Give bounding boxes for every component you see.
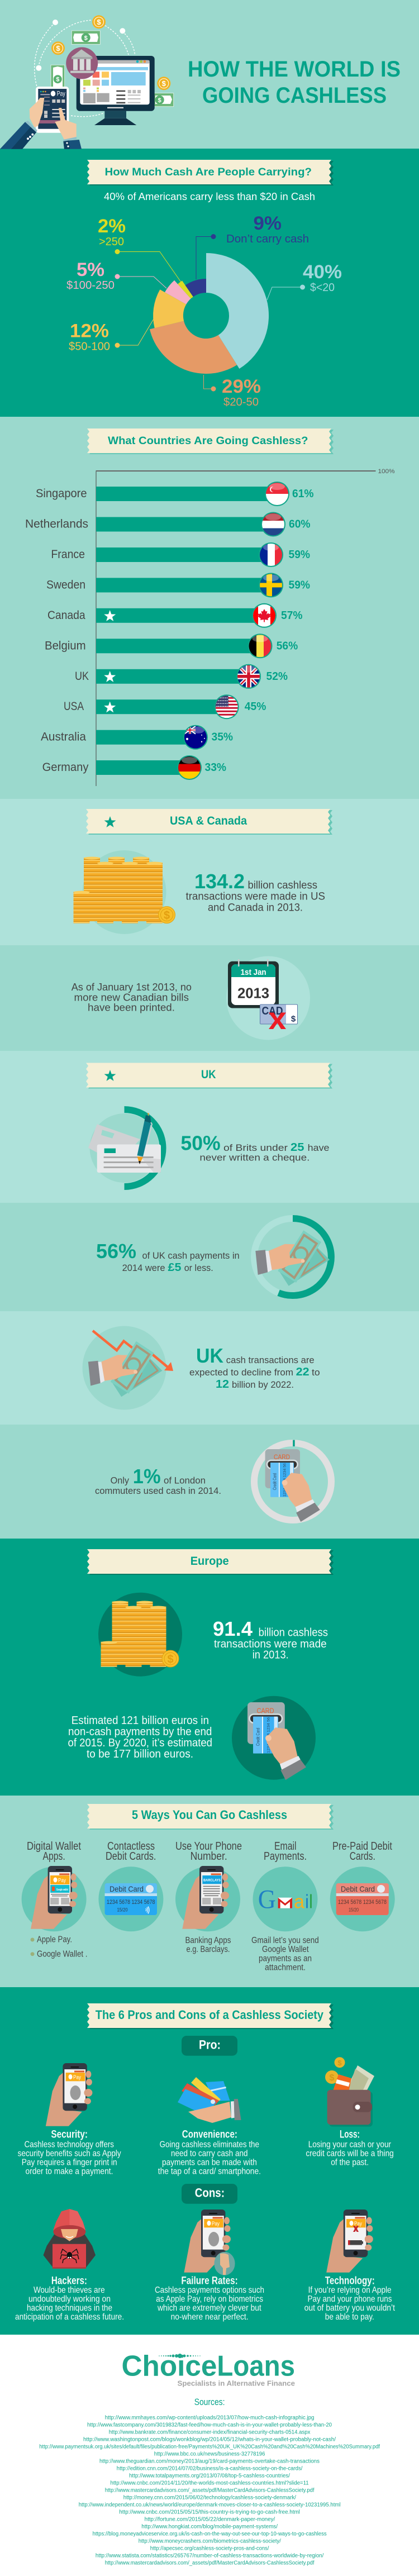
- way: email payments: payments as an: [259, 1954, 312, 1964]
- label: 40%: [267, 261, 342, 300]
- icon: calendar and banknote: 2013: [237, 984, 269, 1001]
- text: source list: http://edition.cnn.com/2014/07/02/business/is-a-cashless-society-on-the-cards/: [117, 2465, 303, 2472]
- con: failure rates: Failure Rates:: [181, 2275, 238, 2287]
- panel: footer: [39, 2350, 380, 2566]
- con: technology: If you’re relying on Apple: [308, 2285, 392, 2295]
- way: use your phone number: Banking Apps: [185, 1936, 231, 1945]
- panel: how much cash: [66, 160, 342, 408]
- icon: calendar and banknote: CAD: [261, 1005, 283, 1017]
- icon: coin stacks: $: [164, 910, 170, 922]
- bar: Sweden: [46, 573, 310, 597]
- bar: Belgium: [45, 634, 298, 658]
- panel: hero: [0, 15, 401, 149]
- heading: UK: [86, 1063, 332, 1088]
- logo: Choice Loans: [122, 2350, 295, 2388]
- pro: loss: [306, 2057, 394, 2167]
- logo: Choice Loans: Loans: [217, 2350, 295, 2382]
- label: 29%: 29%: [222, 376, 261, 397]
- bar: Belgium: Belgium: [45, 639, 86, 652]
- stat: 1% of commuters: [95, 1465, 221, 1496]
- text: source list: http://www.bankrate.com/finance/consumer-index/financial-security-charts-0514.aspx: [109, 2429, 310, 2435]
- icon: payments illustration: $: [56, 77, 59, 83]
- icon: coin stacks: [98, 1593, 182, 1677]
- text: source list: http://www.mastercardadvisors.com/_assets/pdf/MasterCardAdvisors-CashlessSociety.pdf: [105, 2560, 315, 2566]
- donut chart: [150, 253, 269, 374]
- stat: UK cash decline: cash transactions are: [226, 1355, 315, 1365]
- bar: UK: 52%: [266, 670, 288, 683]
- text: estimated euros: to be 177 billion euros.: [87, 1748, 193, 1760]
- icon: cheque and pen: [88, 1110, 163, 1187]
- label: 5%: [66, 259, 166, 292]
- pro: security: [18, 2063, 121, 2176]
- way: pre-paid debit cards: Debit Card: [341, 1884, 375, 1893]
- panel: pros and cons: [15, 2003, 395, 2322]
- way: digital wallet apps: Google wallet: [56, 1888, 68, 1892]
- con: technology: out of battery you wouldn’t: [304, 2303, 395, 2313]
- badge: cons: Cons:: [195, 2186, 225, 2200]
- stat: 1% of commuters: commuters used cash in 2014.: [95, 1485, 221, 1496]
- way: contactless debit cards: [98, 1840, 163, 1931]
- text: source list: http://www.hongkiat.com/blog/mobile-payment-systems/: [141, 2523, 278, 2530]
- way: contactless debit cards: Contactless: [107, 1840, 155, 1853]
- pro: security: Security:: [51, 2129, 88, 2141]
- icon: payments illustration: $: [158, 97, 161, 104]
- panel: Europe: [68, 1549, 334, 1780]
- heading: countries: [87, 428, 334, 454]
- con: failure rates: Pay: [212, 2221, 220, 2227]
- bar: Canada: [47, 603, 303, 628]
- bar: USA: [64, 694, 266, 719]
- bar: Netherlands: 60%: [289, 518, 311, 531]
- text: source list: http://money.cnn.com/2015/06/02/technology/cashless-society-denmark/: [123, 2494, 296, 2501]
- label: 2%: >250: [99, 236, 124, 248]
- stat: 50% of Brits: of Brits under: [223, 1142, 288, 1153]
- way: email payments: Email: [274, 1840, 296, 1853]
- bar: Germany: Germany: [42, 761, 89, 774]
- way: email payments: attachment.: [265, 1963, 306, 1973]
- way: use your phone number: BARCLAYS: [203, 1879, 221, 1883]
- pro: convenience: the tap of a card/ smartphone.: [158, 2166, 261, 2176]
- title: GOING CASHLESS: [202, 83, 387, 108]
- heading: USA and Canada: [86, 809, 332, 835]
- icon: coin stacks: [74, 850, 175, 934]
- way: use your phone number: e.g. Barclays.: [187, 1945, 230, 1954]
- stat: 56% of payments: 56%: [96, 1240, 136, 1263]
- stat: 56% of payments: or less.: [184, 1263, 213, 1273]
- text: estimated euros: non-cash payments by the end: [68, 1726, 212, 1738]
- text: source list: http://www.totalpayments.org/2013/07/08/top-5-cashless-countries/: [129, 2473, 290, 2479]
- label: 9%: [196, 213, 309, 279]
- stat: 134.2 billion: transactions were made in US: [185, 891, 325, 903]
- label: 12%: [69, 319, 154, 353]
- label: 2%: 2%: [98, 216, 126, 237]
- heading: pros and cons: The 6 Pros and Cons of a Cashless Society: [96, 2008, 324, 2022]
- stat: UK cash decline: to: [312, 1367, 320, 1378]
- pro: security: order to make a payment.: [26, 2166, 113, 2176]
- con: hackers: [15, 2209, 124, 2322]
- text: estimated euros: of 2015. By 2020, it’s estimated: [68, 1737, 212, 1749]
- con: hackers: Hackers:: [51, 2275, 87, 2287]
- way: email payments: a: [294, 1892, 304, 1913]
- bar: Sweden: Sweden: [46, 578, 85, 591]
- label: 12%: 12%: [70, 321, 109, 342]
- stat: 56% of payments: [96, 1240, 240, 1274]
- pro: convenience: Convenience:: [182, 2129, 237, 2141]
- text: source list: http://www.fastcompany.com/3019832/fast-feed/how-much-cash-is-in-your-wallet-probably-less-than-20: [87, 2422, 332, 2428]
- text: Canadian bills: have been printed.: [88, 1001, 175, 1013]
- bar chart: 100%: [378, 468, 395, 475]
- text: source list: http://www.bbc.co.uk/news/business-32778196: [154, 2451, 265, 2457]
- text: source list: http://www.theguardian.com/money/2013/aug/19/card-payments-overtake-cash-transactions: [99, 2458, 320, 2464]
- icon: card machine, 1% ring: Credit Card: [273, 1473, 278, 1490]
- label: 5%: $100-250: [66, 279, 115, 292]
- icon: hand with cash and falling arrow: [83, 1326, 173, 1410]
- badge: cons: [182, 2184, 237, 2204]
- way: contactless debit cards: 15/20: [117, 1907, 128, 1913]
- stat: 91.4 billion: 91.4: [213, 1617, 253, 1640]
- label: 29%: $20-50: [223, 396, 259, 408]
- pro: security: Cashless technology offers: [25, 2140, 114, 2149]
- bar: Canada: 57%: [281, 610, 303, 622]
- label: 2%: [98, 216, 181, 282]
- pro: loss: $: [330, 2073, 335, 2083]
- bar: Sweden: 59%: [288, 579, 310, 591]
- way: use your phone number: Number.: [191, 1850, 227, 1863]
- stat: 1% of commuters: 1%: [133, 1465, 161, 1488]
- text: source list: http://www.paymentsuk.org.uk/sites/default/files/publication-free/Payments%20UK_UK%20Cash%20and%20Cash%20Machines%20Summary.pdf: [39, 2444, 380, 2450]
- way: email payments: Gmail let’s you send: [251, 1936, 319, 1945]
- pro: convenience: [158, 2077, 261, 2176]
- con: failure rates: Cashless payments options such: [155, 2285, 264, 2295]
- stat: 56% of payments: 2014 were: [122, 1263, 165, 1273]
- icon: payments illustration: [0, 15, 174, 149]
- heading: pros and cons: [87, 2003, 334, 2029]
- stat: 134.2 billion: and Canada in 2013.: [208, 902, 303, 913]
- con: technology: [304, 2210, 395, 2322]
- text: Canadian bills: As of January 1st 2013, no: [72, 981, 192, 993]
- way: pre-paid debit cards: Cards.: [350, 1850, 375, 1863]
- con: hackers: anticipation of a cashless future.: [15, 2312, 124, 2322]
- icon: coin stacks: $: [167, 1654, 174, 1666]
- bar: Netherlands: [25, 512, 311, 536]
- label: 9%: Don’t carry cash: [226, 233, 309, 245]
- way: pre-paid debit cards: 1234 5678 1234 5678: [338, 1899, 387, 1906]
- stat: 50% of Brits: never written a cheque.: [199, 1152, 310, 1163]
- pro: loss: Loss:: [340, 2129, 360, 2141]
- label: 12%: $50-100: [69, 341, 110, 353]
- pro: loss: Losing your cash or your: [308, 2140, 392, 2149]
- con: failure rates: [155, 2210, 264, 2322]
- con: failure rates: which are extremely clever but: [157, 2303, 261, 2313]
- panel: countries: [25, 428, 395, 786]
- pro: loss: of the past.: [331, 2158, 369, 2167]
- con: technology: Technology:: [325, 2275, 375, 2287]
- way: pre-paid debit cards: [330, 1840, 395, 1931]
- pro: loss: $: [337, 2059, 342, 2067]
- stat: UK cash decline: billion by 2022.: [232, 1379, 294, 1390]
- stat: 50% of Brits: 25: [291, 1141, 304, 1154]
- stat: 50% of Brits: [180, 1132, 330, 1163]
- bar: Singapore: 61%: [292, 488, 314, 500]
- icon: card machine, 1% ring: 1234 5678 1234 56: [284, 1463, 287, 1497]
- way: digital wallet apps: Digital Wallet: [27, 1840, 81, 1853]
- text: source list: http://www.moneycrashers.com/biometrics-cashless-society/: [139, 2538, 281, 2544]
- heading: UK: UK: [201, 1068, 216, 1081]
- way: digital wallet apps: Pay: [58, 1878, 66, 1884]
- label: 40%: 40%: [303, 261, 342, 283]
- pro: loss: credit cards will be a thing: [306, 2149, 394, 2158]
- heading: how much cash: [87, 160, 334, 185]
- stat: UK cash decline: [189, 1344, 320, 1391]
- way: contactless debit cards: 1234 5678 1234 5678: [107, 1899, 155, 1906]
- text: source list: [39, 2415, 380, 2566]
- heading: USA and Canada: USA & Canada: [170, 815, 247, 827]
- con: technology: Pay: [354, 2221, 362, 2227]
- text: source list: https://blog.moneyadviceservice.org.uk/is-cash-on-the-way-out-see-our-top-10-ways-to-go-cashless: [93, 2531, 327, 2537]
- bar: Australia: 35%: [211, 731, 233, 744]
- panel: UK: [83, 1063, 332, 1522]
- subtitle: 40% of Americans carry less than $20 in Cash: [104, 191, 315, 202]
- stat: 134.2 billion: 134.2: [194, 870, 245, 893]
- bar: Belgium: 56%: [277, 640, 298, 652]
- icon: card machine: 1234 5678 1234 56: [267, 1717, 271, 1753]
- way: pre-paid debit cards: 15/20: [349, 1907, 359, 1913]
- text: source list: http://www.independent.co.uk/news/world/europe/denmark-moves-closer-to-a-cashless-society-10231995.html: [79, 2502, 340, 2508]
- stat: 50% of Brits: 50%: [180, 1132, 221, 1155]
- icon: payments illustration: $: [84, 35, 88, 41]
- bar: Netherlands: Netherlands: [25, 517, 88, 531]
- icon: card machine: [232, 1696, 316, 1780]
- stat: 91.4 billion: [213, 1617, 328, 1661]
- text: Canadian bills: more new Canadian bills: [74, 991, 189, 1003]
- stat: UK cash decline: 12: [216, 1378, 229, 1391]
- heading: 5 ways: 5 Ways You Can Go Cashless: [132, 1808, 287, 1822]
- way: digital wallet apps: [22, 1840, 87, 1959]
- panel: 5 ways: [22, 1804, 395, 1973]
- way: email payments: Google Wallet: [262, 1945, 309, 1954]
- bar: France: France: [51, 548, 85, 561]
- icon: payments illustration: $: [56, 44, 60, 53]
- bar: Australia: Australia: [41, 731, 86, 744]
- way: email payments: G: [258, 1885, 276, 1915]
- stat: 56% of payments: £5: [168, 1261, 181, 1274]
- icon: hand with cash, 56% ring: [254, 1218, 331, 1296]
- text: source list: http://apecsec.org/cashless-society-pros-and-cons/: [150, 2545, 269, 2551]
- text: Canadian bills: [72, 981, 192, 1013]
- con: failure rates: no-where near perfect.: [171, 2312, 249, 2322]
- bar: France: [51, 542, 310, 567]
- icon: payments illustration: $: [162, 79, 166, 88]
- icon: card machine: CARD: [256, 1706, 274, 1715]
- way: contactless debit cards: Debit Cards.: [106, 1850, 156, 1863]
- pro: convenience: payments can be made with: [162, 2158, 257, 2167]
- icon: card machine, 1% ring: CARD: [274, 1453, 290, 1461]
- text: source list: http://www.cnbc.com/2014/11/20/the-worlds-most-cashless-countries.html?slide=11: [111, 2480, 309, 2486]
- way: use your phone number: [175, 1840, 242, 1954]
- icon: card machine, 1% ring: [254, 1440, 331, 1522]
- pro: security: Pay: [73, 2075, 81, 2080]
- pro: convenience: need to carry cash and: [171, 2149, 248, 2158]
- stat: UK cash decline: expected to decline from: [189, 1367, 293, 1378]
- text: source list: http://www.mastercardadvisors.com/_assets/pdf/MasterCardAdvisors-CashlessSociety.pdf: [105, 2487, 315, 2493]
- way: digital wallet apps: Apps.: [42, 1850, 65, 1863]
- label: 40%: $<20: [310, 282, 335, 294]
- bar: USA: USA: [64, 700, 84, 713]
- way: digital wallet apps: Google Wallet .: [37, 1950, 87, 1959]
- icon: card machine: Credit Card: [255, 1728, 260, 1746]
- logo: Choice Loans: Choice: [122, 2350, 217, 2382]
- pro: security: security benefits such as Apply: [18, 2149, 121, 2158]
- icon: calendar and banknote: 1st Jan: [241, 968, 266, 977]
- way: email payments: i: [305, 1892, 309, 1913]
- way: use your phone number: Use Your Phone: [175, 1840, 242, 1853]
- text: source list: http://www.cnbc.com/2015/05/15/this-country-is-trying-to-go-cash-free.html: [119, 2509, 300, 2515]
- label: 9%: 9%: [254, 213, 282, 234]
- badge: pro: Pro:: [199, 2038, 221, 2052]
- text: source list: http://www.washingtonpost.com/blogs/wonkblog/wp/2014/05/12/whats-in-your-wallet-probably-not-cash/: [83, 2436, 336, 2442]
- bar: Singapore: Singapore: [36, 487, 87, 500]
- icon: payments illustration: $: [97, 18, 101, 26]
- logo: Choice Loans: Specialists in Alternative Finance: [178, 2379, 295, 2388]
- con: technology: be able to pay.: [325, 2312, 374, 2322]
- bar: UK: UK: [75, 670, 89, 683]
- title: HOW THE WORLD IS: [188, 57, 401, 82]
- stat: 56% of payments: of UK cash payments in: [142, 1250, 240, 1261]
- con: hackers: undoubtedly working on: [28, 2294, 111, 2304]
- way: pre-paid debit cards: Pre-Paid Debit: [332, 1840, 392, 1853]
- way: email payments: [251, 1840, 319, 1973]
- way: contactless debit cards: Debit Card: [109, 1884, 144, 1893]
- con: hackers: hacking techniques in the: [27, 2303, 112, 2313]
- pro: convenience: Going cashless eliminates the: [160, 2140, 259, 2149]
- bar: Germany: [42, 755, 226, 780]
- label: 5%: 5%: [77, 259, 104, 280]
- panel: USA and Canada: [72, 809, 332, 1040]
- bar: Singapore: [36, 482, 314, 506]
- bar: Germany: 33%: [204, 761, 226, 774]
- way: digital wallet apps: Apple Pay.: [37, 1935, 72, 1945]
- stat: UK cash decline: UK: [196, 1344, 223, 1367]
- heading: Europe: Europe: [191, 1555, 229, 1568]
- label: 29%: [203, 375, 261, 408]
- bar: UK: [75, 664, 288, 689]
- heading: how much cash: How Much Cash Are People Carrying?: [105, 166, 312, 178]
- stat: UK cash decline: 22: [296, 1366, 310, 1378]
- icon: calendar and banknote: [226, 956, 310, 1040]
- bar: France: 59%: [288, 549, 310, 561]
- stat: 134.2 billion: [185, 870, 325, 913]
- text: source list: http://www.statista.com/statistics/265767/number-of-cashless-transactions-worldwide-by-region/: [96, 2553, 324, 2559]
- bar chart: [25, 468, 395, 786]
- stat: 1% of commuters: of London: [164, 1475, 206, 1486]
- heading: 5 ways: [87, 1804, 334, 1830]
- bar: USA: 45%: [245, 701, 266, 713]
- stat: 50% of Brits: have: [308, 1142, 330, 1153]
- heading: sources: Sources:: [194, 2397, 225, 2407]
- way: email payments: l: [309, 1892, 313, 1913]
- text: estimated euros: [68, 1715, 212, 1760]
- text: estimated euros: Estimated 121 billion euros in: [72, 1715, 209, 1727]
- title: [188, 57, 401, 108]
- heading: Europe: [87, 1549, 334, 1575]
- text: source list: http://www.mmhayes.com/wp-content/uploads/2013/07/how-much-cash-infographic.jpg: [105, 2415, 314, 2421]
- icon: payments illustration: Pay: [57, 90, 65, 98]
- stat: 1% of commuters: Only: [111, 1475, 129, 1486]
- stat: 91.4 billion: billion cashless: [259, 1627, 328, 1639]
- badge: pro: [182, 2036, 237, 2056]
- bar: Australia: [41, 725, 233, 750]
- icon: calendar and banknote: $: [291, 1015, 296, 1024]
- con: hackers: Would-be thieves are: [34, 2285, 105, 2295]
- pro: security: Pay requires a finger print in: [22, 2158, 117, 2167]
- stat: 134.2 billion: billion cashless: [248, 880, 317, 892]
- con: failure rates: as Apple Pay, rely on biometrics: [156, 2294, 263, 2304]
- text: source list: http://fortune.com/2015/05/22/denmark-paper-money/: [145, 2516, 275, 2522]
- stat: 91.4 billion: in 2013.: [253, 1649, 289, 1661]
- bar: Canada: Canada: [47, 609, 85, 622]
- con: technology: Pay and your phone runs: [307, 2294, 392, 2304]
- stat: 91.4 billion: transactions were made: [214, 1638, 327, 1650]
- heading: countries: What Countries Are Going Cashless?: [108, 435, 308, 447]
- way: email payments: Payments.: [264, 1850, 307, 1863]
